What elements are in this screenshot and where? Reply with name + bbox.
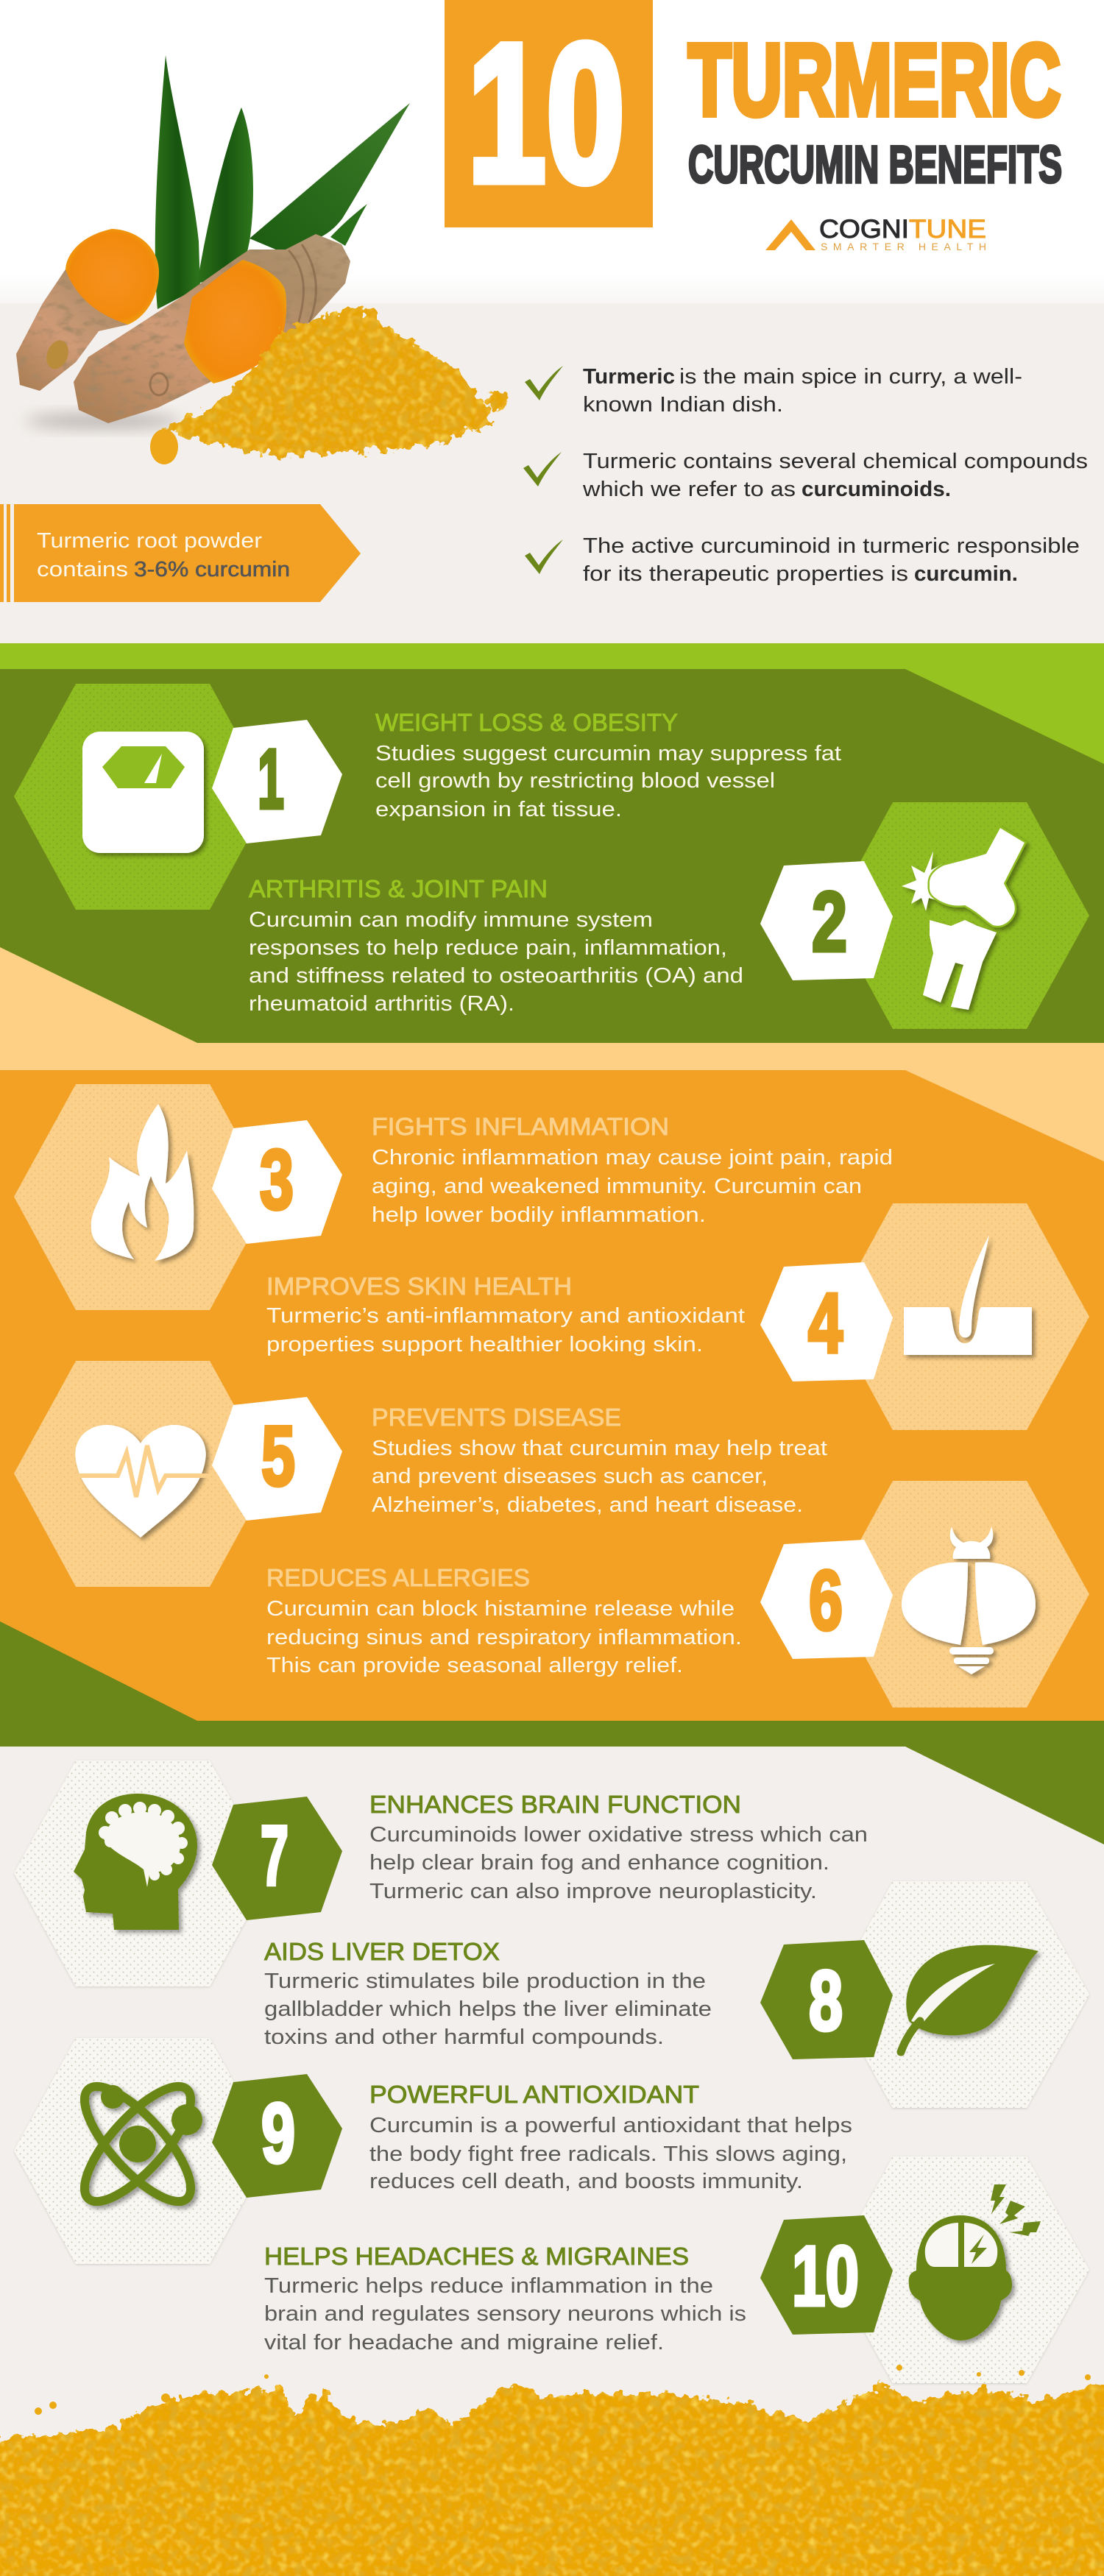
heading: ENHANCES BRAIN FUNCTION [369, 1791, 741, 1818]
main root cut face [184, 260, 286, 383]
benefit 7: brain [14, 1761, 868, 1986]
body text: reduces cell death, and boosts immunity. [369, 2170, 803, 2193]
body text: the body fight free radicals. This slows aging, [369, 2142, 847, 2166]
body text [266, 1597, 742, 1677]
body text: brain and regulates sensory neurons which is [264, 2302, 746, 2326]
panel: orange section [0, 1070, 1104, 1721]
number badge: 5 [261, 1409, 295, 1504]
number badge [212, 2074, 342, 2198]
body text: Curcumin can modify immune system [249, 908, 653, 932]
heading: HELPS HEADACHES & MIGRAINES [264, 2243, 689, 2270]
icon: head with lightning [909, 2184, 1041, 2340]
main root [74, 234, 350, 423]
hexagon icon group [760, 1203, 1089, 1430]
body text [369, 2114, 852, 2193]
body text: Curcuminoids lower oxidative stress which can [369, 1823, 868, 1847]
body text [369, 1823, 868, 1903]
body text: help lower bodily inflammation. [372, 1203, 706, 1227]
body text: Turmeric helps reduce inflammation in the [264, 2274, 713, 2298]
callout: curcumin percentage [0, 504, 361, 602]
number badge: 9 [261, 2087, 295, 2181]
body text: responses to help reduce pain, inflammation, [249, 936, 727, 960]
leaves [155, 55, 410, 309]
bullet 2 text [582, 450, 1088, 501]
panel: light section header band [0, 1721, 1104, 1844]
check 1 [525, 366, 563, 400]
left root knot [43, 337, 72, 372]
heading: IMPROVES SKIN HEALTH [266, 1273, 572, 1300]
heading: REDUCES ALLERGIES [266, 1564, 530, 1591]
body text: This can provide seasonal allergy relief. [266, 1654, 683, 1677]
icon: bee [902, 1526, 1036, 1674]
number badge [760, 1540, 893, 1659]
body text: properties support healthier looking skin. [266, 1333, 703, 1356]
bullet 2 text: Turmeric contains several chemical compounds [583, 450, 1088, 473]
benefit 8: liver [264, 1881, 1089, 2108]
hexagon icon group [760, 1881, 1089, 2108]
hexagon icon group [14, 1761, 342, 1986]
body text: expansion in fat tissue. [375, 798, 622, 821]
benefit 10: headaches [264, 2156, 1089, 2383]
number badge [212, 720, 342, 843]
number badge [212, 1797, 342, 1920]
title block [445, 0, 1062, 252]
callout: curcumin percentage: 3-6% curcumin [134, 558, 290, 581]
body text: aging, and weakened immunity. Curcumin can [372, 1175, 862, 1198]
body text [264, 2274, 746, 2354]
benefit 2: arthritis [249, 802, 1089, 1029]
body text: Turmeric stimulates bile production in the [264, 1970, 706, 1993]
callout: curcumin percentage: Turmeric root powder [37, 529, 262, 553]
number badge: 4 [808, 1276, 843, 1370]
shadow [26, 414, 180, 428]
powder chunk [150, 429, 178, 464]
intro bullet list [523, 365, 1088, 586]
number badge [760, 861, 893, 980]
icon: flame [91, 1104, 194, 1261]
body text: and stiffness related to osteoarthritis (OA) and [249, 964, 743, 988]
bullet 3 text: The active curcuminoid in turmeric responsible [583, 534, 1080, 558]
icon: leaf [901, 1945, 1038, 2052]
turmeric powder footer [0, 2365, 1104, 2576]
number badge [212, 1120, 342, 1244]
number badge [760, 1940, 893, 2059]
number badge: 7 [261, 1809, 289, 1903]
bullet 3 text: curcumin. [914, 562, 1018, 586]
main root rings [150, 244, 316, 395]
icon: atom [68, 2072, 207, 2216]
powder pile [166, 308, 507, 456]
body text: Turmeric’s anti-inflammatory and antioxidant [266, 1304, 745, 1328]
body text [375, 742, 841, 821]
bullet 3 text [583, 534, 1080, 586]
hero illustration: turmeric root and powder [16, 55, 507, 464]
heading: AIDS LIVER DETOX [264, 1938, 500, 1965]
logo: cognitune: TUNE [909, 215, 986, 244]
number badge: 3 [260, 1133, 294, 1227]
number badge: 6 [809, 1554, 843, 1648]
icon: head with brain [74, 1794, 197, 1930]
hexagon icon group [760, 1481, 1089, 1708]
body text: Studies show that curcumin may help treat [372, 1437, 827, 1460]
hexagon icon group [14, 1084, 342, 1310]
benefit 3: inflammation [14, 1084, 893, 1310]
hexagon icon group [14, 2038, 342, 2264]
body text: Curcumin is a powerful antioxidant that helps [369, 2114, 852, 2137]
body text [264, 1970, 712, 2049]
hexagon icon group [14, 684, 342, 910]
number badge: 10 [792, 2229, 859, 2324]
body text [372, 1146, 893, 1227]
body text: Chronic inflammation may cause joint pain, rapid [372, 1146, 893, 1170]
body text: Studies suggest curcumin may suppress fat [375, 742, 841, 765]
callout: curcumin percentage: contains [37, 558, 128, 581]
number badge: 8 [809, 1954, 843, 2048]
check 2 [523, 452, 562, 486]
body text: and prevent diseases such as cancer, [372, 1465, 768, 1488]
body text [372, 1437, 827, 1517]
body text: reducing sinus and respiratory inflammation. [266, 1626, 742, 1649]
body text: help clear brain fog and enhance cognition. [369, 1851, 829, 1875]
heading: FIGHTS INFLAMMATION [372, 1113, 669, 1140]
body text: cell growth by restricting blood vessel [375, 769, 775, 793]
number badge [760, 1262, 893, 1381]
bullet 2 text: which we refer to as [582, 478, 796, 501]
bullet 1 text [583, 365, 1022, 417]
bullet 2 text: curcuminoids. [802, 478, 951, 501]
benefit 4: skin [266, 1203, 1089, 1430]
bullet 1 text: known Indian dish. [583, 393, 783, 417]
logo: cognitune: SMARTER HEALTH [821, 241, 986, 252]
hexagon icon group [14, 1361, 342, 1587]
heading: WEIGHT LOSS & OBESITY [375, 709, 678, 736]
bullet 3 text: for its therapeutic properties is [583, 562, 908, 586]
icon: heart with pulse [72, 1425, 210, 1538]
benefit 9: antioxidant [14, 2038, 852, 2264]
icon: knee joint [902, 828, 1025, 1010]
number badge: 2 [812, 875, 847, 969]
number badge [212, 1397, 342, 1521]
number badge: 1 [258, 732, 284, 827]
body text: toxins and other harmful compounds. [264, 2025, 664, 2049]
benefit 6: allergies [266, 1481, 1089, 1708]
icon: scale [82, 732, 204, 853]
icon: hair follicle [904, 1235, 1032, 1355]
benefit 1: weight loss [14, 684, 841, 910]
body text: gallbladder which helps the liver eliminate [264, 1998, 712, 2021]
panel: green section [0, 643, 1104, 1070]
number badge [760, 2215, 893, 2335]
logo: cognitune [765, 215, 986, 252]
check 3 [525, 539, 563, 574]
benefit 5: disease [14, 1361, 827, 1587]
hexagon icon group [760, 802, 1089, 1029]
logo: cognitune: COGNI [819, 215, 909, 244]
bullet 1 text: Turmeric [583, 365, 675, 389]
body text: vital for headache and migraine relief. [264, 2331, 664, 2354]
heading: POWERFUL ANTIOXIDANT [369, 2081, 699, 2108]
body text: rheumatoid arthritis (RA). [249, 992, 514, 1016]
orange number box: 10 [467, 2, 625, 223]
heading: PREVENTS DISEASE [372, 1404, 621, 1431]
body text [249, 908, 743, 1016]
body text [266, 1304, 745, 1356]
body text: Alzheimer’s, diabetes, and heart disease. [372, 1493, 803, 1517]
body text: Turmeric can also improve neuroplasticity. [369, 1880, 817, 1903]
left root cut face [66, 229, 159, 325]
body text: Curcumin can block histamine release while [266, 1597, 735, 1621]
hexagon icon group [760, 2156, 1089, 2383]
bullet 1 text: is the main spice in curry, a well- [679, 365, 1022, 389]
heading: ARTHRITIS & JOINT PAIN [249, 875, 548, 902]
header white area [0, 0, 1104, 303]
left root [16, 269, 147, 391]
